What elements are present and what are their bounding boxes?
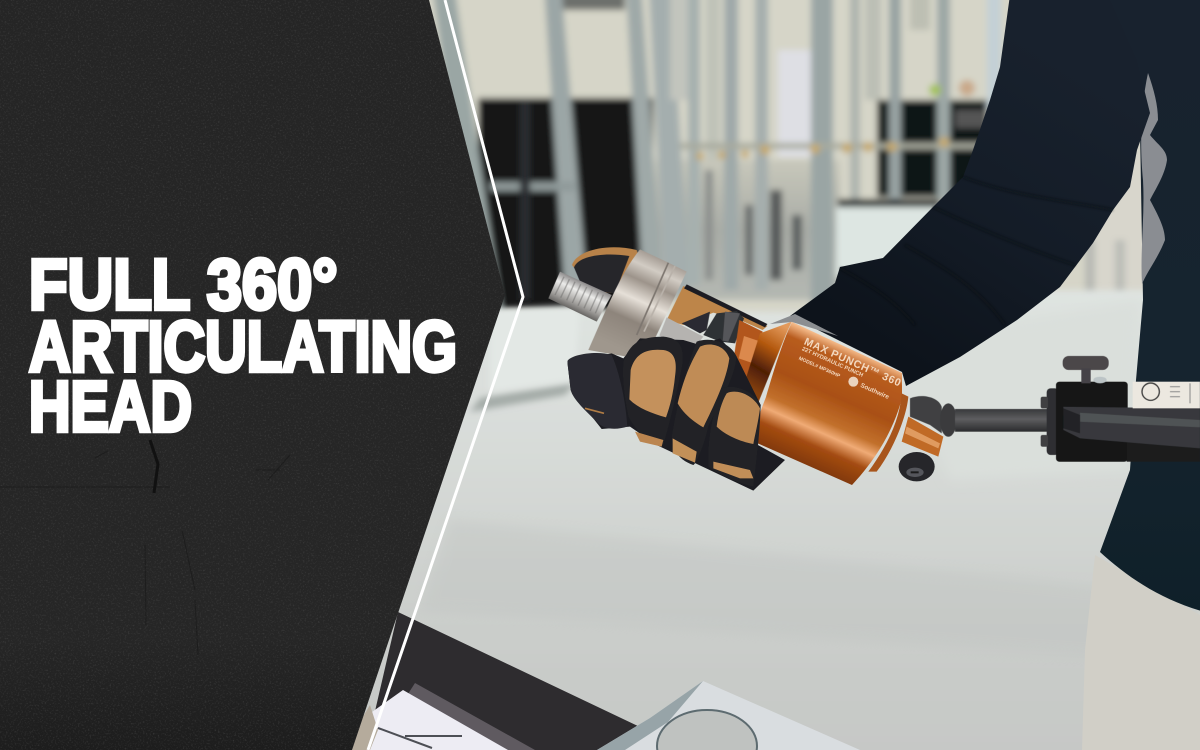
tool engraving text: MAX PUNCH™ 360 [802, 336, 903, 390]
glove: third finger [672, 340, 737, 465]
copper neck [731, 320, 763, 387]
swivel clamp [910, 396, 942, 433]
glove: rear palm behind punch [572, 247, 640, 293]
glove: fourth finger [708, 387, 761, 487]
copper swivel joint [868, 393, 908, 472]
hydraulic punch tool head and gloved hand [548, 247, 943, 491]
title [29, 246, 457, 447]
dark collar rings [703, 311, 744, 343]
photo background: steel stud wall [400, 0, 1200, 410]
white chevron outline [368, 0, 523, 750]
knob on swivel [899, 452, 935, 481]
worker torso and trousers [1082, 0, 1200, 750]
tool engraving text: MODEL# MP360HP [798, 356, 842, 380]
worker sleeve [770, 0, 1150, 386]
tool engraving text: Southwire [859, 382, 890, 401]
copper tapered collar [743, 322, 792, 407]
hydraulic pump rod and handle [910, 356, 1200, 462]
connecting rod [955, 409, 1050, 432]
product label on handle [1133, 382, 1200, 408]
table edge with paper and punched metal plate [352, 612, 860, 750]
glove: first finger [567, 353, 627, 429]
glove: hand silhouette [567, 338, 785, 491]
copper cylinder body [756, 322, 902, 485]
thumb screw [1063, 356, 1109, 383]
title line 2: ARTICULATING [29, 308, 457, 387]
handle flange [1047, 388, 1059, 455]
title line 3: HEAD [29, 368, 192, 447]
threaded punch stud [548, 272, 612, 322]
handle body [1056, 382, 1128, 462]
steel punch die ring [588, 249, 687, 357]
draw stud behind fingers [659, 317, 703, 356]
tool engraving text: 22T HYDRAULIC PUNCH [801, 346, 864, 379]
dark title panel with grunge texture [0, 0, 520, 750]
title line 1: FULL 360° [29, 246, 338, 325]
photo background: polished floor [350, 290, 1200, 750]
glove: second finger [623, 337, 683, 445]
